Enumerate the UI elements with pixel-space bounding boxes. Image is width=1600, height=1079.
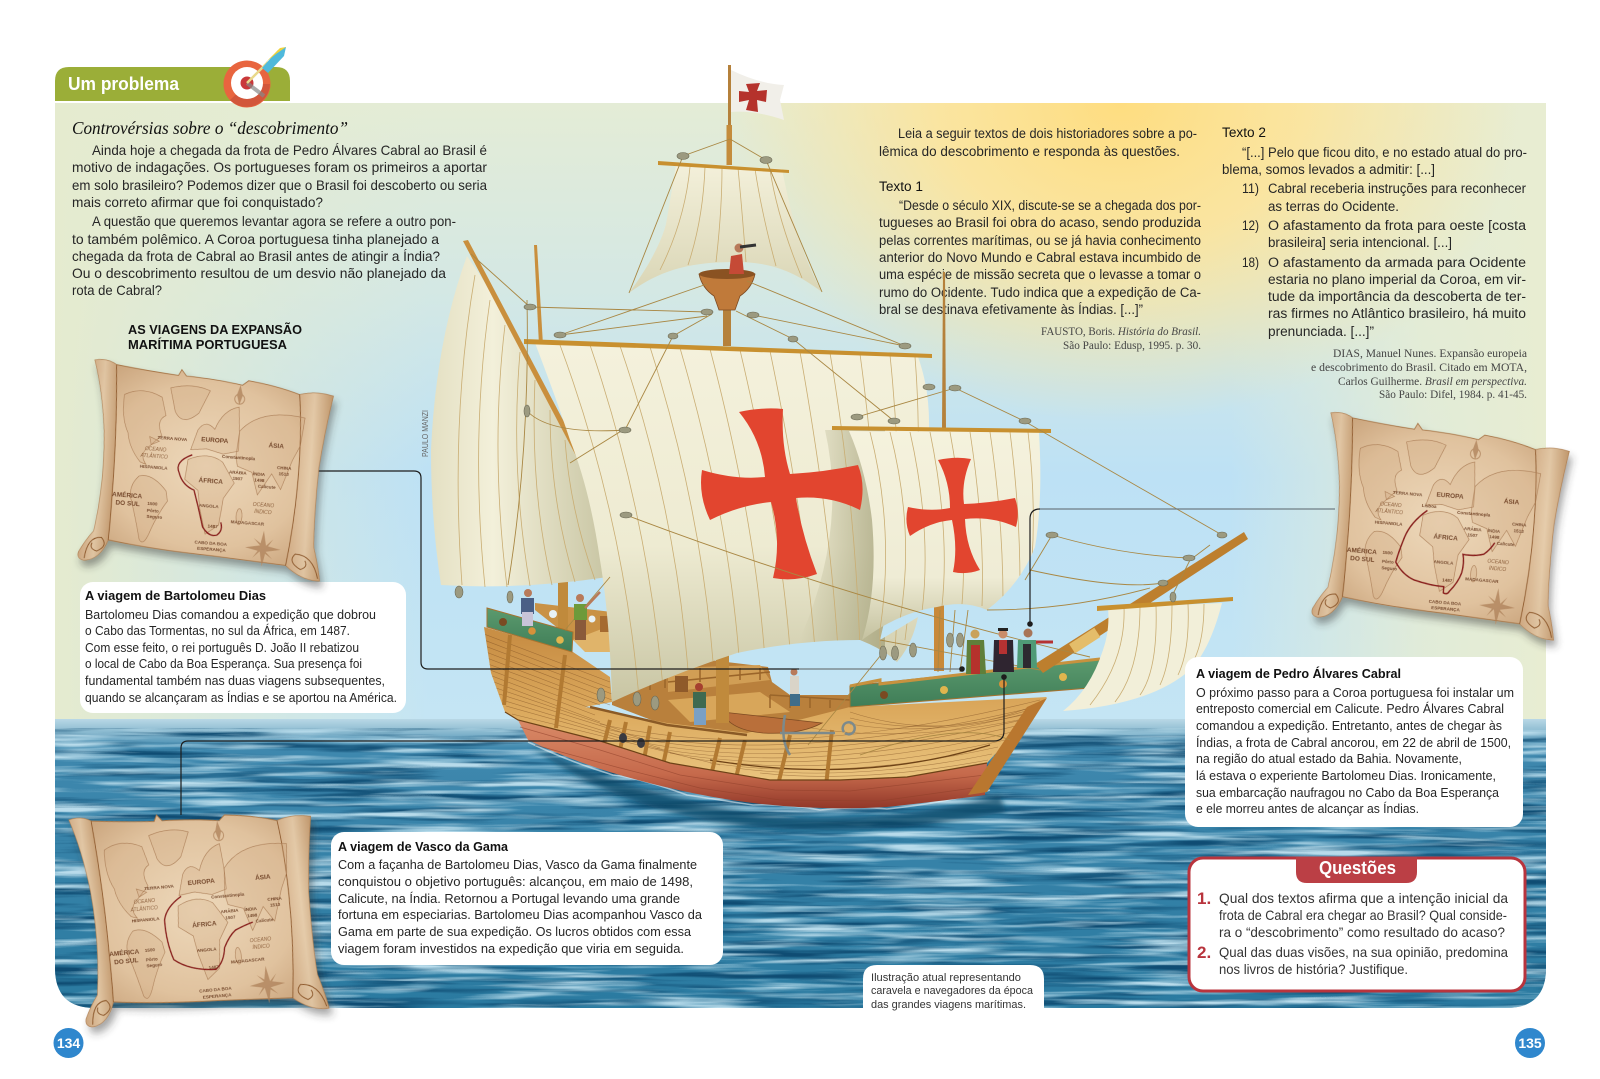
- map labels: ÍNDIA: [244, 904, 258, 912]
- bow green band: [850, 659, 1100, 707]
- text block: Leia a seguir: Leia a seguir textos de dois historiadores sobre a po-: [898, 126, 1197, 141]
- text block: Texto 1: “Desde o século XIX, discute-se se a chegada dos por-: [899, 198, 1201, 213]
- figures: navigators on bow: [966, 628, 1053, 674]
- map labels: ATLÂNTICO: [139, 452, 168, 461]
- hull red lower: [518, 720, 987, 808]
- map labels: 1498: [247, 912, 258, 918]
- intro text: Ou o descobrimento resultou de um desvio não planejado da: [72, 265, 446, 281]
- map labels: OCEANO: [1380, 501, 1402, 509]
- question 1: frota de Cabral era chegar ao Brasil? Qual conside-: [1219, 907, 1507, 923]
- mizzen yard: [463, 240, 600, 492]
- fore mast upper: [942, 272, 946, 430]
- citation: Dias: São Paulo: Difel, 1984. p. 41-45.: [1379, 389, 1527, 401]
- map labels: Seguro: [1381, 565, 1397, 571]
- spritsail: [1063, 597, 1233, 711]
- route line: [174, 454, 226, 536]
- map labels: 1507: [232, 476, 243, 482]
- rigging: [471, 139, 1222, 755]
- map labels: [102, 871, 292, 1008]
- text block: Texto 1: [879, 179, 1201, 317]
- map labels: Pôrto: [1382, 559, 1394, 565]
- text block: Texto 2: 12): [1242, 218, 1259, 233]
- rigging blocks: [455, 152, 1227, 710]
- map labels: ÁFRICA: [1433, 531, 1458, 543]
- small mizzen mast: [534, 245, 543, 345]
- text block: Texto 2: Cabral receberia instruções para reconhecer: [1268, 181, 1526, 196]
- map: Vasco da Gama route: [65, 797, 331, 1031]
- panel: Questoes: [1189, 857, 1525, 991]
- page number 135: [1515, 1028, 1545, 1058]
- map labels: ESPERANÇA: [1431, 605, 1461, 613]
- map labels: Calicute: [1497, 541, 1515, 547]
- intro text: A questão que queremos levantar agora se refere a outro pon-: [92, 213, 456, 229]
- question 2: [1197, 943, 1508, 977]
- question 2: Qual das duas visões, na sua opinião, predomina: [1219, 944, 1508, 960]
- caption: Ilustração atual representando: [871, 972, 1021, 984]
- intro text: Ainda hoje a chegada da frota de Pedro Álvares Cabral ao Brasil é: [92, 142, 487, 158]
- map labels: ARÁBIA: [229, 469, 248, 476]
- illustrator credit: PAULO MANZI: [421, 410, 430, 457]
- fore sail: [849, 431, 1040, 640]
- caption: das grandes viagens marítimas.: [871, 999, 1026, 1011]
- text block: Texto 2: blema, somos levados a admitir: [...]: [1222, 162, 1435, 177]
- citation: Fausto: [1041, 326, 1201, 352]
- map labels: ÍNDICO: [1489, 565, 1507, 573]
- text block: Leia a seguir: lêmica do descobrimento e responda às questões.: [879, 144, 1180, 159]
- map labels: 1500: [1382, 550, 1393, 556]
- panel: Pedro Alvares Cabral: Índias, a frota de Cabral ancorou, em 22 de abril de 1500,: [1196, 735, 1511, 750]
- panel: Pedro Alvares Cabral: na região do atual estado da Bahia. Novamente,: [1196, 751, 1462, 766]
- stern green band: [487, 608, 573, 652]
- citation: Dias: Carlos Guilherme. Brasil em perspectiva.: [1338, 376, 1527, 388]
- intro text: to também polêmico. A Coroa portuguesa tinha planejado a: [72, 231, 439, 247]
- text block: Texto 2: estaria no plano imperial da Coroa, em vir-: [1268, 272, 1526, 287]
- panel: Pedro Alvares Cabral: e ele morreu antes de alcançar as Índias.: [1196, 801, 1419, 816]
- map labels: OCEANO: [133, 898, 156, 906]
- map labels: ANGOLA: [199, 503, 220, 509]
- map labels: 1498: [254, 478, 265, 483]
- map labels: TERRA NOVA: [144, 883, 175, 891]
- intro text: mais correto afirmar que foi conquistado?: [72, 194, 323, 210]
- question 2: nos livros de história? Justifique.: [1219, 961, 1408, 977]
- panel: Vasco da Gama: [331, 832, 723, 965]
- map labels: ÍNDIA: [253, 469, 266, 477]
- panel: Pedro Alvares Cabral: lá estava o experiente Bartolomeu Dias. Ironicamente,: [1196, 768, 1496, 783]
- text block: Texto 1: anterior do Novo Mundo e Cabral estava incumbido de: [879, 250, 1201, 265]
- fore yard: [832, 426, 1051, 433]
- map labels: ÍNDICO: [252, 943, 270, 951]
- map labels: 1487: [1442, 577, 1453, 583]
- section tab: Um problema: Um problema: [68, 74, 180, 94]
- map labels: OCEANO: [253, 502, 274, 509]
- panel: Vasco da Gama: Com a façanha de Bartolomeu Dias, Vasco da Gama finalmente: [338, 857, 697, 872]
- panel: Pedro Alvares Cabral: O próximo passo para a Coroa portuguesa foi instalar um: [1196, 685, 1514, 700]
- map labels: 1487: [207, 523, 218, 529]
- map labels: ESPERANÇA: [197, 546, 227, 553]
- intro text: em solo brasileiro? Podemos dizer que o Brasil foi descoberto ou seria: [72, 177, 487, 193]
- fore mast lower: [934, 605, 944, 671]
- heading: As viagens: AS VIAGENS DA EXPANSÃO: [128, 322, 302, 337]
- map labels: 1513: [278, 471, 289, 477]
- text block: Texto 1: uma espécie de missão secreta que o levasse a tomar o: [879, 267, 1201, 282]
- map labels: 1507: [1467, 532, 1478, 538]
- map labels: ÁFRICA: [192, 918, 217, 930]
- panel: Bartolomeu Dias: o local de Cabo da Boa Esperança. Sua presença foi: [85, 656, 362, 671]
- hull wood: [484, 627, 1047, 786]
- map labels: ARÁBIA: [1464, 525, 1483, 532]
- map labels: [109, 429, 294, 557]
- map labels: OCEANO: [1487, 559, 1509, 566]
- illustration: caravel ship: [431, 65, 1248, 830]
- citation: Fausto: FAUSTO, Boris. História do Brasil.: [1041, 326, 1201, 338]
- heading tab: Questoes: Questões: [1319, 858, 1396, 878]
- map labels: CHINA: [1512, 522, 1527, 528]
- caption: caravela e navegadores da época: [871, 985, 1034, 997]
- panel: Bartolomeu Dias: Bartolomeu Dias comandou a expedição que dobrou: [85, 607, 376, 622]
- map labels: Pôrto: [146, 956, 158, 962]
- map labels: 1507: [225, 914, 236, 920]
- panel: Vasco da Gama: A viagem de Vasco da Gama: [338, 839, 509, 854]
- text block: Leia a seguir: [879, 126, 1197, 159]
- text block: Texto 1: bral se destinava efetivamente às Índias. [...]”: [879, 302, 1143, 317]
- text block: Texto 2: “[...] Pelo que ficou dito, e no estado atual do pro-: [1242, 145, 1527, 160]
- stem post: [968, 698, 1047, 795]
- route line: [1394, 508, 1497, 597]
- figure: sailor stern 1: [521, 589, 534, 626]
- route line: [162, 890, 257, 974]
- map labels: Constantinopla: [1457, 510, 1491, 518]
- topsail: [629, 165, 822, 293]
- panel: Bartolomeu Dias: o Cabo das Tormentas, no sul da África, em 1487.: [85, 623, 350, 638]
- top yard: [658, 161, 789, 173]
- question 1: Qual dos textos afirma que a intenção inicial da: [1219, 890, 1508, 906]
- main sail: [535, 343, 929, 710]
- map labels: CABO DA BOA: [199, 986, 232, 994]
- panel: Pedro Alvares Cabral: A viagem de Pedro Álvares Cabral: [1196, 666, 1401, 681]
- heading: As viagens: [128, 322, 302, 352]
- map labels: HISPANIOLA: [1375, 519, 1403, 527]
- icon: target with arrow: [224, 47, 286, 108]
- map labels: ATLÂNTICO: [1374, 507, 1403, 517]
- map labels: OCEANO: [145, 446, 167, 454]
- panel: Bartolomeu Dias: fundamental também nas duas viagens subsequentes,: [85, 673, 385, 688]
- page number 135: 135: [1518, 1035, 1542, 1051]
- question 1: [1197, 889, 1508, 940]
- map labels: Constantinopla: [211, 892, 245, 900]
- citation: Dias: e descobrimento do Brasil. Citado em MOTA,: [1311, 362, 1527, 374]
- map labels: DO SUL: [114, 957, 139, 966]
- crows nest: [699, 244, 756, 310]
- map labels: ESPERANÇA: [203, 992, 232, 1000]
- map labels: TERRA NOVA: [157, 435, 188, 442]
- map labels: CHINA: [277, 465, 292, 471]
- question 2: 2.: [1197, 943, 1211, 962]
- text block: Texto 2: 18): [1242, 255, 1259, 270]
- map labels: HISPANIOLA: [140, 464, 168, 471]
- panel: Pedro Alvares Cabral: entreposto comercial em Calicute. Pedro Álvares Cabral: [1196, 701, 1504, 716]
- map labels: Seguro: [146, 962, 163, 968]
- map labels: DO SUL: [1350, 555, 1375, 564]
- panel: Vasco da Gama: Gama em parte de sua expedição. Os lucros obtidos com essa: [338, 924, 692, 939]
- heading: As viagens: MARÍTIMA PORTUGUESA: [128, 337, 287, 352]
- map labels: ANGOLA: [1433, 559, 1454, 566]
- ship wake: [528, 742, 1006, 830]
- map labels: ÁSIA: [1504, 496, 1520, 507]
- heading tab: Questoes: [1296, 857, 1417, 883]
- background panel: [55, 103, 1546, 1009]
- map labels: ÁSIA: [268, 440, 285, 451]
- mizzen sail: [431, 256, 608, 587]
- main mast lower: [716, 655, 729, 723]
- map labels: MADAGASCAR: [231, 957, 265, 965]
- section tab: Um problema: [55, 47, 290, 108]
- text block: Texto 2: Texto 2: [1222, 125, 1266, 140]
- text block: Texto 2: ras firmes no Atlântico brasileiro, há muito: [1268, 306, 1526, 321]
- text block: Texto 1: Texto 1: [879, 179, 923, 194]
- flag: [731, 70, 784, 120]
- page number 134: [54, 1028, 84, 1058]
- map labels: 1487: [208, 964, 219, 970]
- map labels: Calicute: [255, 917, 274, 924]
- map labels: 1500: [147, 501, 158, 506]
- figure: sailor stern 2: [574, 592, 600, 640]
- map labels: EUROPA: [187, 878, 215, 887]
- intro text: [72, 142, 487, 298]
- intro text: rota de Cabral?: [72, 282, 162, 298]
- main yard: [524, 339, 932, 358]
- text block: Texto 1: pelas correntes marítimas, ou se já havia conhecimento: [879, 233, 1201, 248]
- map labels: ÍNDIA: [1488, 526, 1501, 534]
- text block: Texto 2: brasileira] seria intencional. [...]: [1268, 235, 1452, 250]
- map labels: ANGOLA: [197, 946, 217, 953]
- map labels: OCEANO: [250, 936, 272, 944]
- intro text: motivo de indagações. Os portugueses foram os primeiros a aportar: [72, 159, 487, 175]
- map labels: TERRA NOVA: [1393, 490, 1423, 498]
- bowsprit: [1035, 532, 1248, 673]
- panel: Bartolomeu Dias: [80, 582, 406, 713]
- text block: Texto 2: prenunciada. [...]”: [1268, 324, 1374, 339]
- map labels: Lisboa: [1422, 503, 1437, 509]
- panel: Bartolomeu Dias: A viagem de Bartolomeu Dias: [85, 588, 266, 603]
- map labels: AMÉRICA: [1347, 545, 1377, 556]
- map labels: Seguro: [146, 514, 163, 520]
- panel: Vasco da Gama: Calicute, na Índia. Retornou a Portugal levando uma grande: [338, 891, 680, 906]
- text block: Texto 1: rumo do Ocidente. Tudo indica que a expedição de Ca-: [879, 285, 1201, 300]
- main mast upper and flag pole: [723, 65, 732, 346]
- citation: Dias: [1311, 348, 1527, 401]
- map labels: AMÉRICA: [109, 946, 140, 958]
- stern deck wall: [535, 582, 850, 736]
- panel: Vasco da Gama: conquistou o objetivo português: alcançou, em maio de 1498,: [338, 874, 693, 889]
- figure: woman sailor: [790, 668, 800, 706]
- map labels: MADAGASCAR: [1465, 576, 1499, 584]
- panel: Bartolomeu Dias: quando se alcançaram as Índias e se aportou na América.: [85, 690, 397, 705]
- map labels: AMÉRICA: [112, 489, 143, 500]
- map labels: Pôrto: [147, 508, 159, 514]
- main sail cross: [701, 408, 863, 579]
- connector: Cabral: [1027, 509, 1335, 627]
- map labels: Calicute: [258, 484, 276, 490]
- heading: Controversias: Controvérsias sobre o “descobrimento”: [72, 118, 348, 138]
- text block: Texto 2: 11): [1242, 181, 1259, 196]
- caption: [863, 965, 1044, 1012]
- panel: Bartolomeu Dias: Com esse feito, o rei português D. João II rebatizou: [85, 640, 359, 655]
- map labels: CABO DA BOA: [1429, 599, 1462, 607]
- panel: Pedro Alvares Cabral: sua embarcação naufragou no Cabo da Boa Esperança: [1196, 785, 1500, 800]
- text block: Texto 2: O afastamento da frota para oeste [costa: [1268, 218, 1527, 233]
- sea: [55, 719, 1546, 1009]
- fore sail cross: [906, 458, 1018, 573]
- connector: Bartolomeu Dias: [315, 471, 965, 672]
- panel: Pedro Alvares Cabral: [1185, 657, 1523, 827]
- text block: Texto 2: O afastamento da armada para Ocidente: [1268, 255, 1526, 270]
- map labels: ÁSIA: [255, 871, 271, 882]
- citation: Dias: DIAS, Manuel Nunes. Expansão europeia: [1333, 348, 1527, 360]
- anchor: [780, 715, 855, 755]
- map labels: ATLÂNTICO: [129, 904, 158, 914]
- map labels: EUROPA: [201, 436, 229, 445]
- map labels: CABO DA BOA: [194, 539, 228, 547]
- map labels: DO SUL: [115, 499, 140, 508]
- rowboat: [722, 712, 822, 733]
- map: Pedro Alvares Cabral route: [1311, 412, 1571, 640]
- intro text: chegada da frota de Cabral ao Brasil antes de atingir a Índia?: [72, 248, 440, 264]
- connector: Vasco da Gama: [181, 674, 1007, 815]
- panel: Vasco da Gama: viagem foram investidos na expedição que viria em seguida.: [338, 941, 684, 956]
- panel: Vasco da Gama: fortuna em especiarias. Bartolomeu Dias acompanhou Vasco da: [338, 907, 703, 922]
- map labels: 1513: [270, 902, 281, 908]
- map labels: EUROPA: [1436, 492, 1464, 501]
- map labels: MADAGASCAR: [231, 519, 265, 527]
- text block: Texto 1: tugueses ao Brasil foi obra do acaso, sendo produzida: [879, 215, 1201, 230]
- question 1: 1.: [1197, 889, 1211, 908]
- page number 134: 134: [57, 1035, 80, 1051]
- map labels: 1500: [145, 947, 156, 953]
- map labels: ÁFRICA: [198, 475, 224, 486]
- text block: Texto 2: [1222, 125, 1527, 339]
- map: Bartolomeu Dias route: [77, 359, 335, 581]
- citation: Fausto: São Paulo: Edusp, 1995. p. 30.: [1063, 340, 1201, 352]
- map labels: HISPANIOLA: [131, 916, 160, 924]
- panel: Pedro Alvares Cabral: comandou a expedição. Entretanto, antes de chegar às: [1196, 718, 1502, 733]
- text block: Texto 2: tude da importância da descoberta de ter-: [1268, 289, 1526, 304]
- map labels: [1343, 484, 1529, 618]
- map labels: 1513: [1513, 528, 1524, 534]
- map labels: Constantinopla: [222, 454, 256, 462]
- map labels: ARÁBIA: [220, 907, 239, 915]
- map labels: ÍNDICO: [254, 508, 272, 516]
- map labels: 1498: [1489, 534, 1500, 540]
- figure: sailor waist: [693, 683, 706, 725]
- question 1: ra o “descobrimento” como resultado do acaso?: [1219, 924, 1505, 940]
- figure: lookout: [729, 244, 756, 274]
- text block: Texto 2: as terras do Ocidente.: [1268, 199, 1399, 214]
- map labels: CHINA: [267, 895, 283, 902]
